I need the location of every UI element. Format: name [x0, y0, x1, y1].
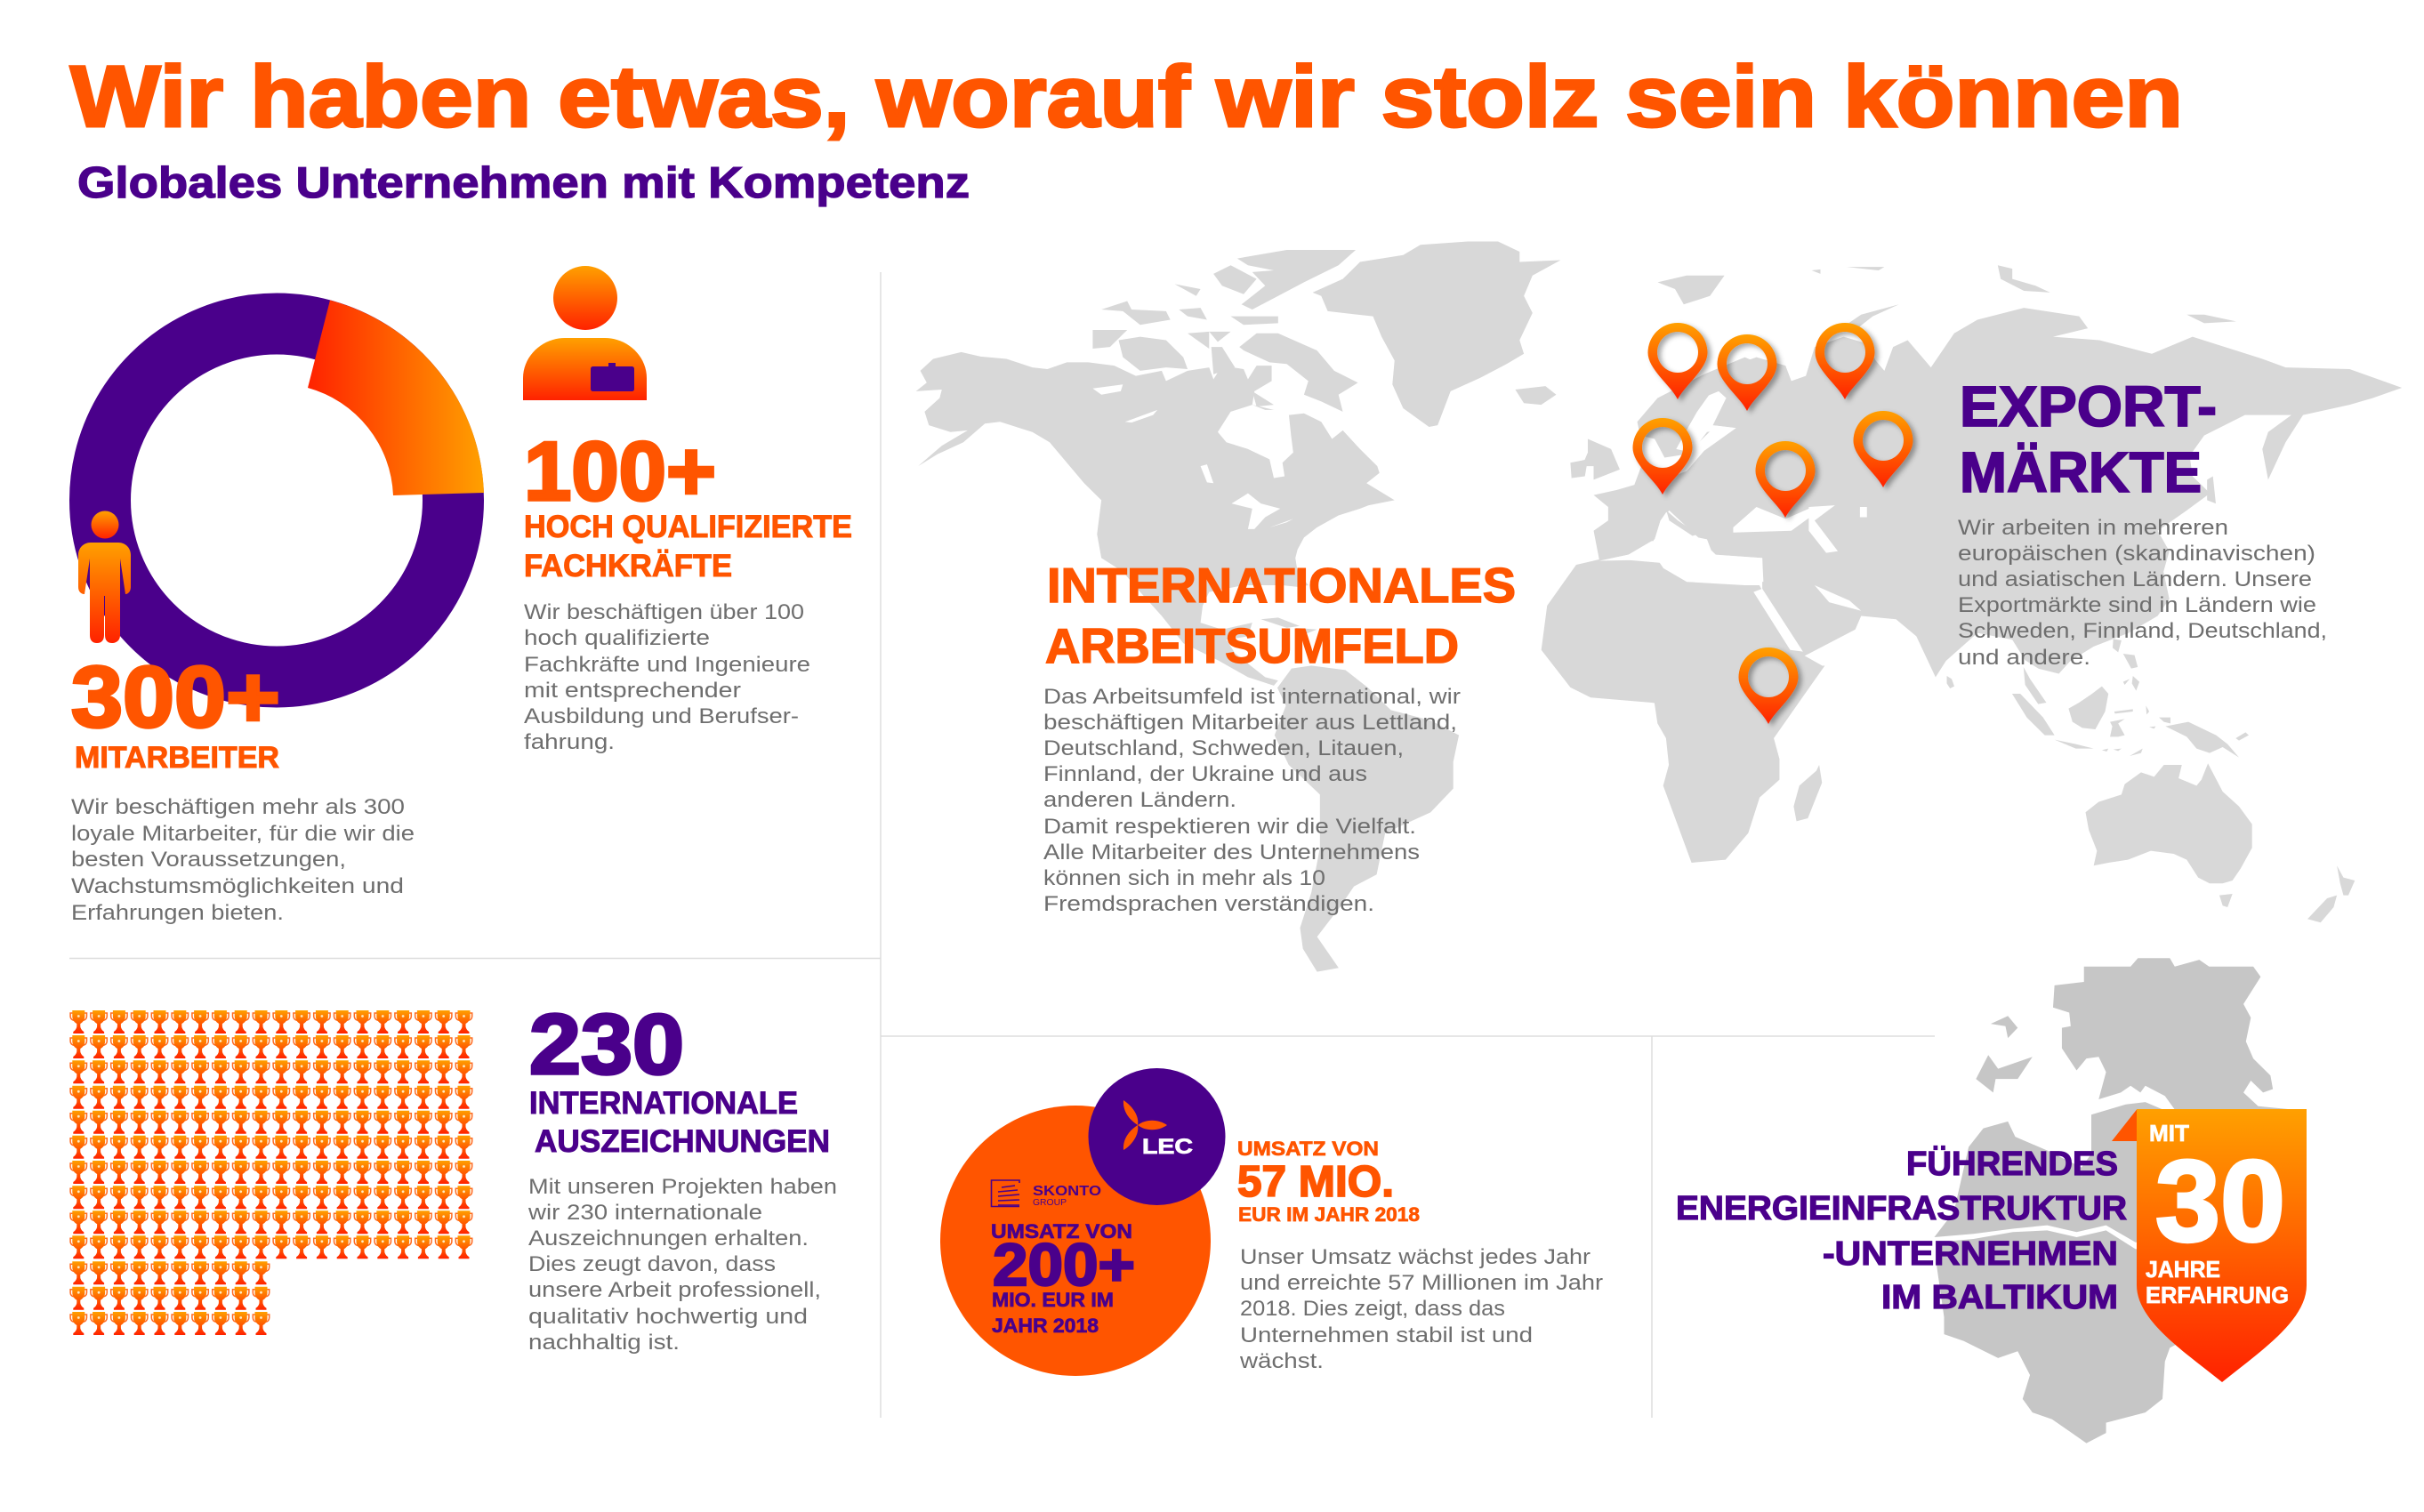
dividers — [69, 272, 1935, 1418]
text: work environment — [1043, 685, 1461, 916]
stat: 300+: 300+ — [71, 648, 280, 745]
pin 7 — [1738, 647, 1799, 724]
circle: LEC logo — [1089, 1068, 1226, 1205]
text: awards: Auszeichnungen erhalten. — [528, 1226, 809, 1251]
stat: 57 Mio: EUR IM JAHR 2018 — [1238, 1203, 1420, 1226]
text: specialists: Ausbildung und Berufser- — [524, 704, 799, 728]
text: specialists: hoch qualifizierte — [524, 626, 710, 650]
text: awards: Mit unseren Projekten haben — [528, 1175, 837, 1199]
text: export markets: und andere. — [1958, 646, 2090, 670]
panel: revenue — [940, 1068, 1603, 1376]
map pins — [1633, 323, 1913, 724]
heading: EXPORT- — [1960, 374, 2217, 438]
text: awards: unsere Arbeit professionell, — [528, 1278, 821, 1302]
heading: MÄRKTE — [1960, 440, 2202, 504]
icon grid: 230 trophies — [70, 1010, 472, 1335]
world map — [916, 241, 2402, 972]
text: employees: Wachstumsmöglichkeiten und — [71, 874, 404, 898]
label: specialists — [524, 510, 852, 583]
stat: 100+: 100+ — [524, 424, 716, 518]
label: specialists: FACHKRÄFTE — [524, 549, 732, 583]
greenland — [1313, 241, 1560, 427]
text: revenue: wächst. — [1239, 1349, 1324, 1373]
text: specialists: fahrung. — [524, 730, 615, 754]
text: specialists — [524, 600, 810, 754]
stat: 200+: JAHR 2018 — [992, 1315, 1099, 1337]
logo text: Skonto Group: SKONTO — [1033, 1184, 1101, 1199]
heading: -UNTERNEHMEN — [1823, 1235, 2118, 1273]
south america, southern africa, madagascar — [1275, 647, 1824, 972]
circle: Skonto group revenue — [940, 1106, 1211, 1376]
pin 2 — [1717, 334, 1777, 411]
logo text: Skonto Group: GROUP — [1033, 1198, 1067, 1208]
text: export markets: Schweden, Finnland, Deutschland, — [1958, 619, 2327, 643]
text: revenue: und erreichte 57 Millionen im Jahr — [1240, 1271, 1603, 1295]
text: specialists: Wir beschäftigen über 100 — [524, 600, 804, 624]
badge: 30 years — [2112, 1109, 2307, 1382]
text: work environment: können sich in mehr als 10 — [1043, 866, 1325, 890]
icon: specialist with briefcase — [523, 266, 647, 400]
text: work environment: Finnland, der Ukraine und aus — [1043, 762, 1367, 786]
panel: 100+ specialists — [523, 266, 852, 754]
logo text: LEC: LEC — [1142, 1135, 1193, 1159]
text: export markets: Exportmärkte sind in Ländern wie — [1958, 593, 2316, 617]
text: specialists: mit entsprechender — [524, 679, 741, 703]
baltic states map — [1934, 958, 2292, 1444]
text: awards: wir 230 internationale — [527, 1201, 762, 1225]
text: awards — [527, 1175, 837, 1355]
text: work environment: Damit respektieren wir die Vielfalt. — [1043, 815, 1416, 839]
donut chart — [100, 301, 484, 677]
text: work environment: beschäftigen Mitarbeiter aus Lettland, — [1043, 711, 1457, 735]
badge: 30 years: MIT — [2149, 1120, 2189, 1146]
text: awards: nachhaltig ist. — [528, 1331, 680, 1355]
heading — [1045, 558, 1516, 673]
title: Wir haben etwas, worauf wir stolz sein können — [70, 48, 2183, 145]
text: specialists: Fachkräfte und Ingenieure — [524, 653, 810, 677]
heading: INTERNATIONALES — [1047, 558, 1516, 613]
badge: 30 years: ERFAHRUNG — [2146, 1282, 2289, 1308]
text: work environment: anderen Ländern. — [1043, 788, 1236, 812]
panel: international work environment — [1043, 558, 1516, 916]
heading: FÜHRENDES — [1906, 1145, 2118, 1183]
panel: awards — [70, 997, 837, 1355]
text: work environment: Alle Mitarbeiter des Unternehmens — [1043, 840, 1420, 865]
subtitle: Globales Unternehmen mit Kompetenz — [77, 159, 970, 207]
stat: 200+: UMSATZ VON — [991, 1220, 1132, 1243]
text: employees: Wir beschäftigen mehr als 300 — [71, 795, 405, 819]
pin 3 — [1815, 323, 1875, 399]
pin 1 — [1647, 323, 1708, 399]
label: awards: AUSZEICHNUNGEN — [535, 1124, 830, 1159]
pin 5 — [1854, 411, 1913, 487]
text: work environment: Fremdsprachen verständigen. — [1043, 892, 1374, 916]
panel: 300+ employees — [71, 301, 484, 925]
stat: 57 Mio: 57 MIO. — [1237, 1158, 1394, 1206]
heading: ARBEITSUMFELD — [1045, 618, 1459, 673]
pin 6 — [1756, 441, 1815, 518]
label: awards — [529, 1086, 830, 1159]
heading — [1676, 1145, 2127, 1316]
stat: 230: 230 — [529, 997, 684, 1092]
badge: 30 years: 30 — [2155, 1136, 2285, 1266]
heading: ENERGIEINFRASTRUKTUR — [1676, 1190, 2127, 1227]
panel: leading company in the Baltics — [1676, 1109, 2307, 1382]
pin 4 — [1633, 418, 1692, 495]
badge: 30 years: JAHRE — [2146, 1256, 2220, 1283]
icon: person — [78, 511, 131, 643]
eurasia and north africa — [1542, 265, 2402, 708]
icon: Skonto logo — [991, 1180, 1019, 1206]
text: export markets: europäischen (skandinavischen) — [1958, 542, 2315, 566]
text: work environment: Deutschland, Schweden, Litauen, — [1043, 736, 1404, 760]
stat: 57 Mio: UMSATZ VON — [1237, 1138, 1379, 1160]
heading: IM BALTIKUM — [1881, 1279, 2118, 1316]
text: revenue: 2018. Dies zeigt, dass das — [1240, 1297, 1505, 1321]
text: awards: qualitativ hochwertig und — [528, 1305, 808, 1329]
stat: 57 Mio — [1237, 1138, 1420, 1226]
panel: export markets — [1958, 374, 2327, 670]
text: revenue: Unternehmen stabil ist und — [1240, 1323, 1533, 1347]
north america and arctic islands — [916, 241, 1560, 686]
label: specialists: HOCH QUALIFIZIERTE — [524, 510, 852, 544]
text: employees: besten Voraussetzungen, — [71, 848, 346, 872]
label: Mitarbeiter: MITARBEITER — [75, 741, 279, 775]
label: awards: INTERNATIONALE — [529, 1086, 798, 1121]
text: revenue — [1239, 1245, 1603, 1373]
text: awards: Dies zeugt davon, dass — [528, 1252, 776, 1276]
text: revenue: Unser Umsatz wächst jedes Jahr — [1240, 1245, 1590, 1269]
text: export markets — [1958, 516, 2327, 670]
text: employees: loyale Mitarbeiter, für die wir die — [71, 822, 415, 846]
text: employees — [71, 795, 415, 925]
text: export markets: Wir arbeiten in mehreren — [1958, 516, 2228, 540]
text: work environment: Das Arbeitsumfeld ist international, wir — [1043, 685, 1461, 709]
heading — [1960, 374, 2217, 504]
text: employees: Erfahrungen bieten. — [71, 901, 284, 925]
logo text: Skonto Group — [1033, 1184, 1101, 1208]
text: export markets: und asiatischen Ländern. Unsere — [1958, 567, 2312, 591]
icon: wind turbine blades — [1123, 1100, 1167, 1150]
stat: 200+ — [991, 1220, 1135, 1337]
stat: 200+: MIO. EUR IM — [992, 1289, 1114, 1311]
stat: 200+: 200+ — [993, 1232, 1135, 1299]
south east asia, australia, new zealand — [1947, 639, 2355, 922]
